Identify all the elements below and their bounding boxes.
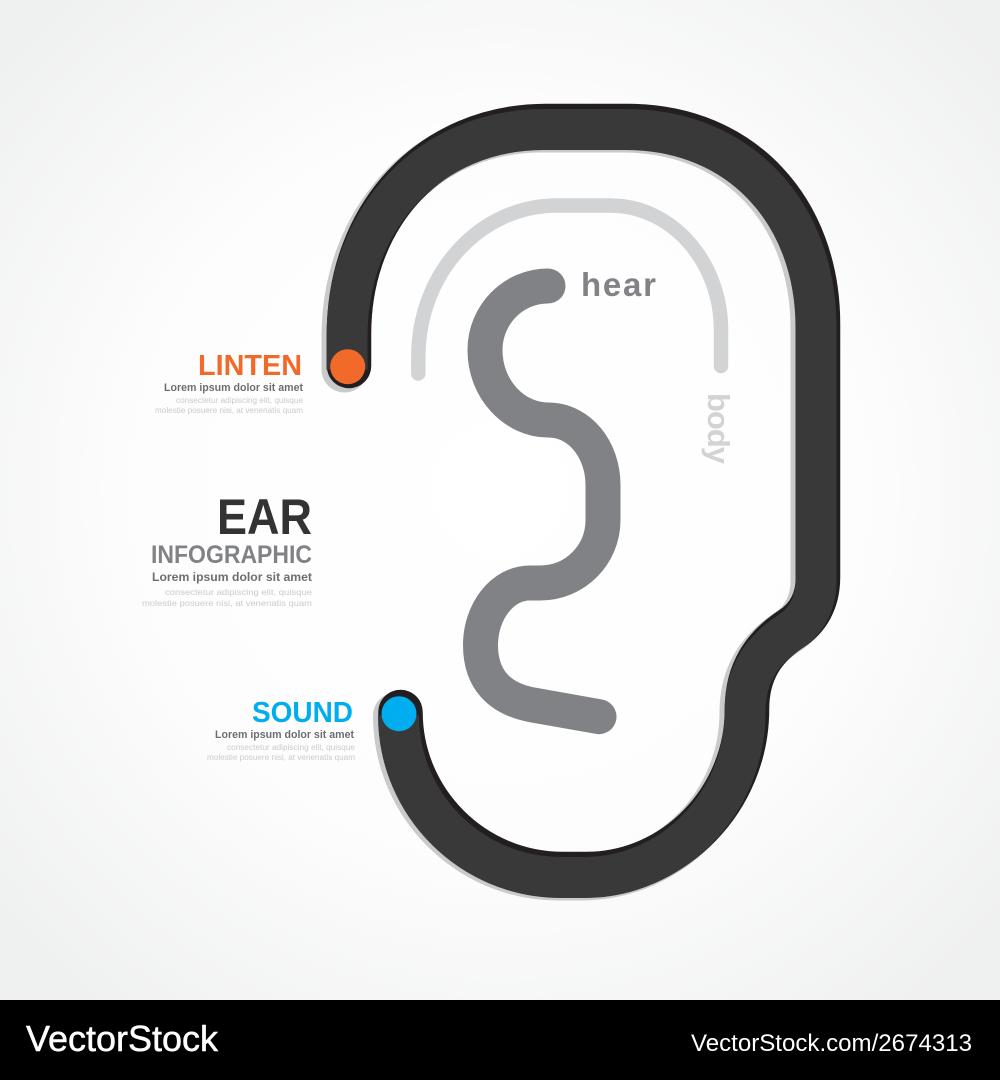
text block: linten: consectetur adipiscing elit, quisque [176, 396, 304, 405]
footer url: VectorStock.com/2674313 [691, 1030, 972, 1057]
text block: ear infographic: molestie posuere nisi, at venenatis quam [142, 598, 312, 608]
text block: ear infographic: consectetur adipiscing elit, quisque [165, 587, 312, 597]
text block: ear infographic: Lorem ipsum dolor sit amet [152, 570, 312, 584]
text block: linten: Lorem ipsum dolor sit amet [164, 382, 303, 394]
label: hear: hear [581, 266, 656, 303]
text block: sound: Lorem ipsum dolor sit amet [215, 729, 354, 741]
text block: linten: molestie posuere nisi, at venenatis quam [155, 406, 303, 415]
text block: ear infographic [142, 489, 312, 608]
text block: ear infographic: EAR [217, 489, 312, 545]
footer bar [0, 1000, 1000, 1080]
ear outline: main thick dark line [344, 126, 818, 878]
text block: ear infographic: INFOGRAPHIC [151, 541, 312, 569]
blue dot [382, 696, 416, 731]
inner canal: grey S curve [480, 286, 603, 717]
label: body: body [701, 393, 736, 465]
orange dot [330, 349, 365, 384]
inner helix: light grey arc [418, 206, 721, 374]
text block: sound: molestie posuere nisi, at venenatis quam [207, 753, 355, 762]
footer brand: VectorStock [26, 1018, 219, 1059]
text block: sound: consectetur adipiscing elit, quisque [227, 743, 356, 752]
text block: sound [207, 697, 356, 762]
text block: sound: SOUND [252, 697, 353, 729]
text block: linten: LINTEN [198, 350, 302, 382]
text block: linten [155, 350, 304, 415]
